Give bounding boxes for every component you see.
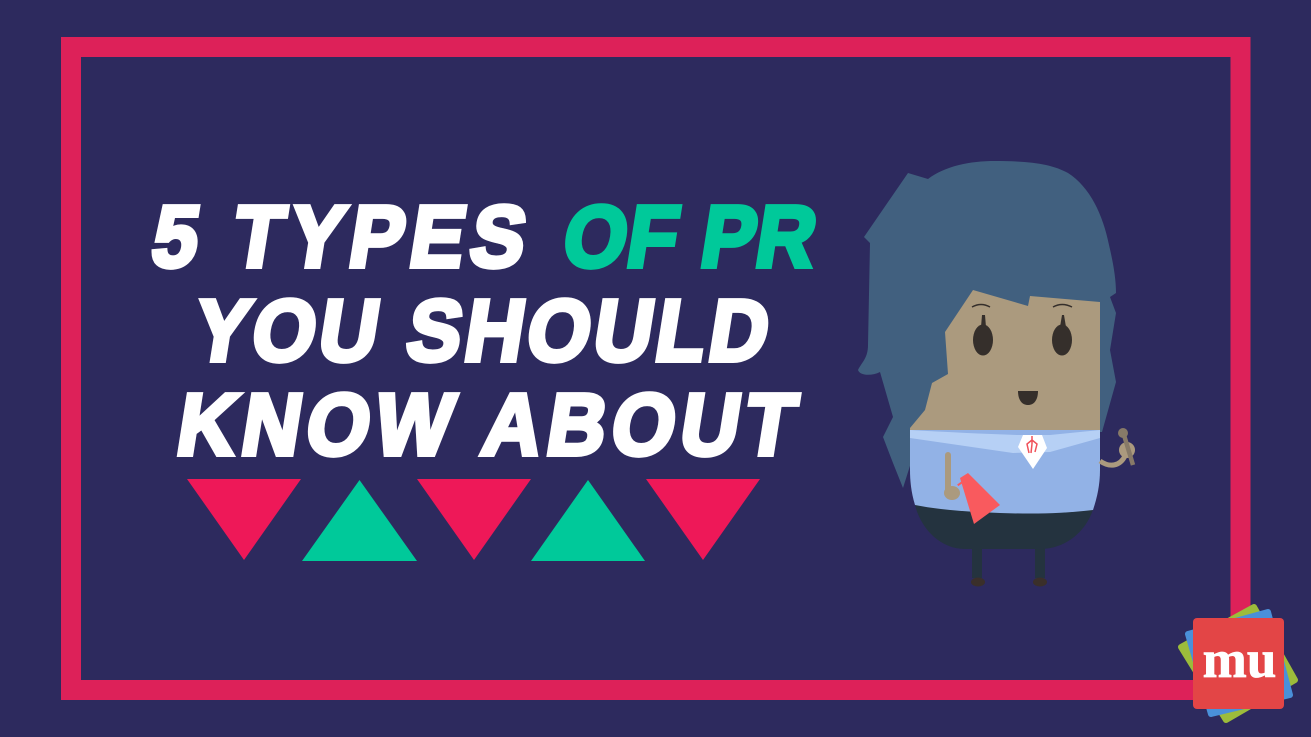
character: woman with megaphone and microphone — [858, 161, 1135, 586]
logo text: mu — [1203, 631, 1276, 689]
megaphone — [957, 473, 1000, 524]
logo blue card — [1188, 612, 1290, 714]
title: 5 TYPES — [146, 187, 534, 285]
triangle row — [187, 479, 760, 561]
shirt — [910, 430, 1100, 514]
hair — [858, 161, 1116, 488]
logo red card — [1193, 618, 1284, 709]
face — [910, 290, 1100, 440]
left arm — [944, 452, 960, 500]
eyebrows — [972, 304, 1072, 307]
legs and feet — [971, 545, 1047, 586]
collar — [910, 430, 1100, 453]
tie — [1018, 435, 1047, 469]
title — [146, 187, 824, 473]
logo green card — [1181, 607, 1295, 720]
right arm and microphone — [1100, 428, 1135, 465]
logo: mu — [1181, 607, 1295, 720]
mouth — [1018, 391, 1038, 405]
title: KNOW ABOUT — [171, 375, 803, 473]
panel: pink frame — [71, 47, 1240, 690]
title: OF PR — [557, 187, 824, 285]
eyes — [973, 315, 1072, 356]
title: YOU SHOULD — [188, 281, 776, 379]
trousers — [914, 500, 1095, 549]
